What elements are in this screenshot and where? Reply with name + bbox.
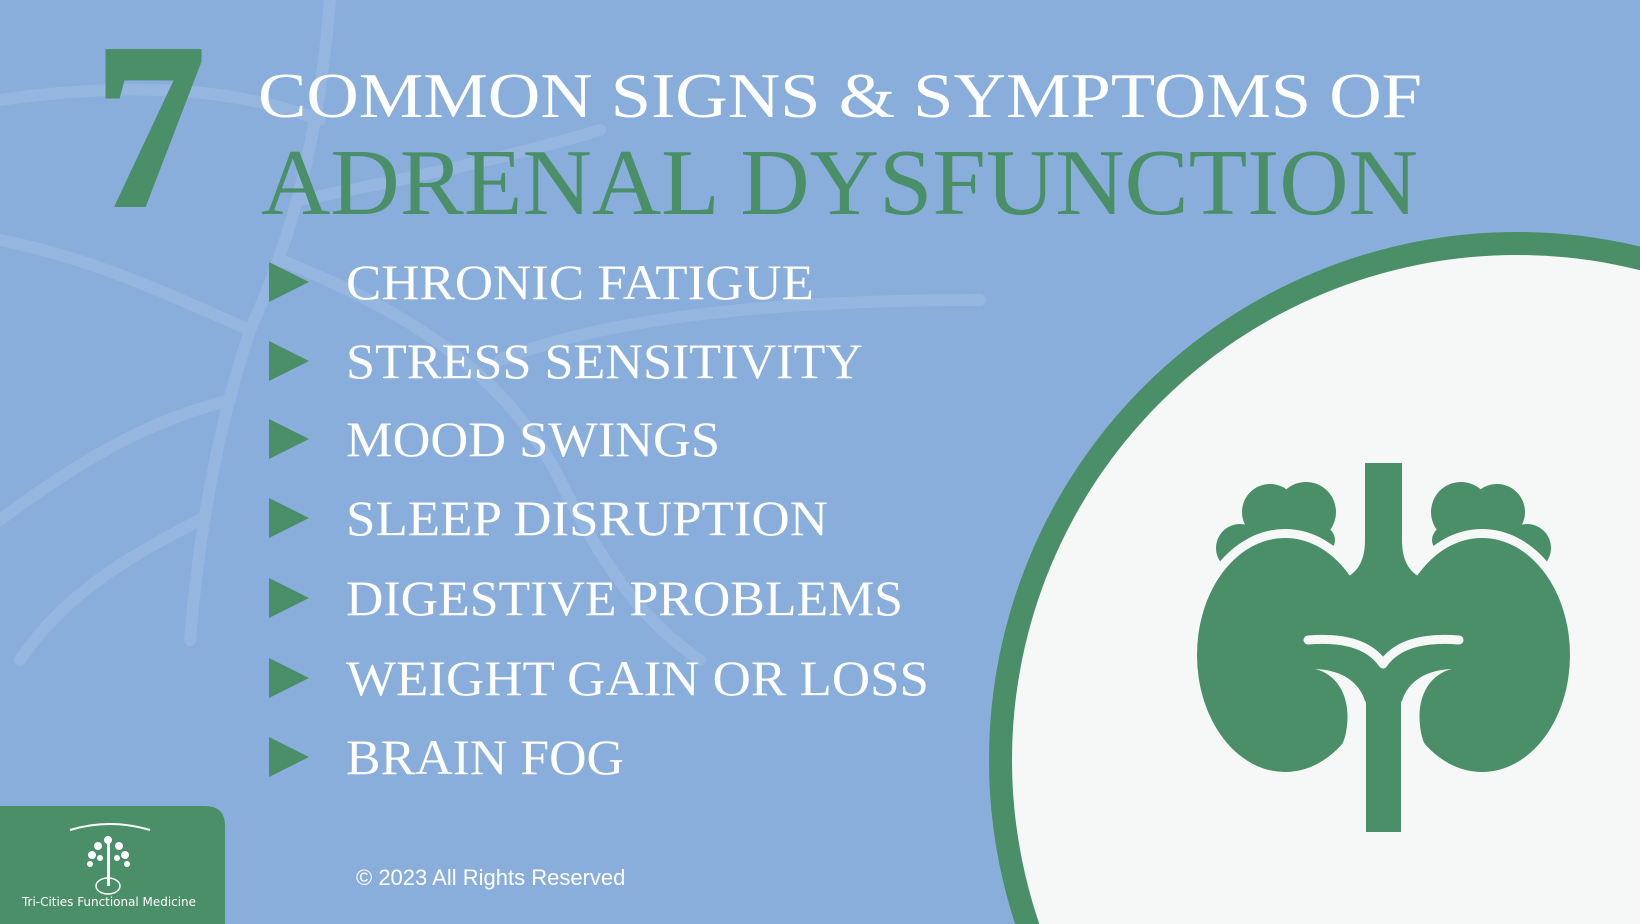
footer copyright: © 2023 All Rights Reserved [356,865,625,890]
logo text: Tri-Cities Functional Medicine [21,894,196,909]
icon: kidneys and adrenal glands [1188,463,1579,832]
item 5: DIGESTIVE PROBLEMS [346,570,903,626]
item 7: BRAIN FOG [346,729,624,785]
circle panel with kidney [989,232,1640,924]
item 1: CHRONIC FATIGUE [346,254,814,310]
item 3: MOOD SWINGS [346,411,720,467]
big number 7: 7 [96,0,204,255]
item 2: STRESS SENSITIVITY [346,333,863,389]
logo tree [87,836,130,894]
logo arc [70,824,150,830]
item 4: SLEEP DISRUPTION [346,490,828,546]
item 6: WEIGHT GAIN OR LOSS [346,650,929,706]
logo panel [0,806,225,924]
symptom list [269,254,929,785]
title line 1: COMMON SIGNS & SYMPTOMS OF [258,60,1422,131]
decorative background tree [0,0,980,660]
title line 2: ADRENAL DYSFUNCTION [261,131,1418,235]
